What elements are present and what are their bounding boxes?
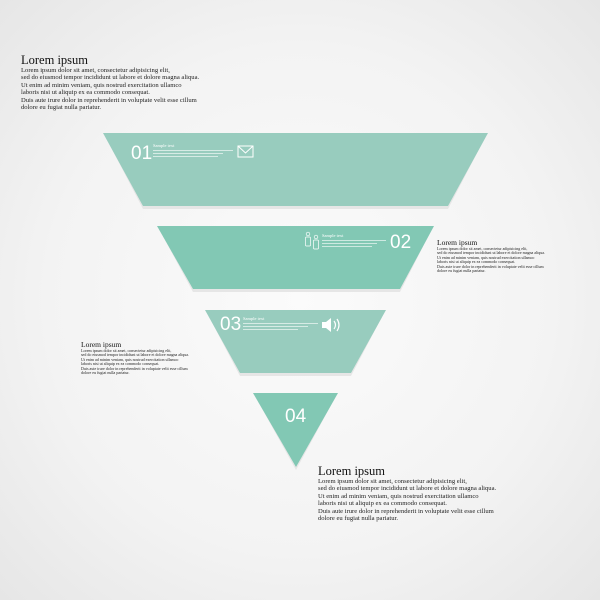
- text block: right of 02: dolore eu fugiat nulla pariatur.: [437, 268, 486, 273]
- text block: right of 02: [437, 238, 545, 273]
- segment 01: Sample text: [153, 143, 175, 148]
- text block: bottom right: Ut enim ad minim veniam, quis nostrud exercitation ullamco: [318, 493, 479, 500]
- text block: left of 03: [81, 340, 189, 375]
- text block: top left: sed do eiusmod tempor incididunt ut labore et dolore magna aliqua.: [21, 74, 199, 81]
- icon: speaker: [322, 318, 339, 332]
- segment 04: [253, 393, 338, 470]
- text block: top left: Lorem ipsum dolor sit amet, consectetur adipisicing elit,: [21, 67, 170, 74]
- text block: left of 03: Duis aute irure dolor in reprehenderit in voluptate velit esse cillum: [81, 366, 188, 371]
- segment 02: [157, 226, 434, 292]
- segment 01: 01: [131, 143, 152, 164]
- text block: right of 02: Ut enim ad minim veniam, quis nostrud exercitation ullamco: [437, 255, 534, 260]
- text block: bottom right: dolore eu fugiat nulla pariatur.: [318, 515, 398, 522]
- text block: left of 03: Lorem ipsum dolor sit amet, consectetur adipisicing elit,: [81, 348, 171, 353]
- segment 02: Sample text: [322, 233, 344, 238]
- icon: envelope: [238, 146, 253, 157]
- text block: left of 03: Lorem ipsum: [81, 340, 121, 349]
- text block: left of 03: Ut enim ad minim veniam, quis nostrud exercitation ullamco: [81, 357, 178, 362]
- text block: bottom right: Lorem ipsum: [318, 464, 385, 478]
- text block: bottom right: laboris nisi ut aliquip ex ea commodo consequat.: [318, 500, 447, 507]
- text block: bottom right: Duis aute irure dolor in reprehenderit in voluptate velit esse cillum: [318, 508, 494, 515]
- text block: right of 02: Lorem ipsum: [437, 238, 477, 247]
- text block: right of 02: sed do eiusmod tempor incididunt ut labore et dolore magna aliqua.: [437, 250, 545, 255]
- icon: people: [306, 232, 318, 249]
- text block: left of 03: laboris nisi ut aliquip ex ea commodo consequat.: [81, 361, 159, 366]
- text block: top left: laboris nisi ut aliquip ex ea commodo consequat.: [21, 89, 150, 96]
- text block: left of 03: dolore eu fugiat nulla pariatur.: [81, 370, 130, 375]
- segment 03: [205, 310, 386, 376]
- text block: left of 03: sed do eiusmod tempor incididunt ut labore et dolore magna aliqua.: [81, 352, 189, 357]
- segment 03: Sample text: [243, 316, 265, 321]
- text block: right of 02: Duis aute irure dolor in reprehenderit in voluptate velit esse cillum: [437, 264, 544, 269]
- text block: top left: Duis aute irure dolor in reprehenderit in voluptate velit esse cillum: [21, 97, 197, 104]
- text block: bottom right: Lorem ipsum dolor sit amet, consectetur adipisicing elit,: [318, 478, 467, 485]
- text block: top left: dolore eu fugiat nulla pariatur.: [21, 104, 101, 111]
- segment 03: 03: [220, 314, 241, 335]
- text block: bottom right: [318, 464, 496, 522]
- text block: top left: [21, 53, 199, 111]
- text block: right of 02: Lorem ipsum dolor sit amet, consectetur adipisicing elit,: [437, 246, 527, 251]
- segment 02: 02: [390, 232, 411, 253]
- text block: bottom right: sed do eiusmod tempor incididunt ut labore et dolore magna aliqua.: [318, 485, 496, 492]
- text block: top left: Ut enim ad minim veniam, quis nostrud exercitation ullamco: [21, 82, 182, 89]
- segment 04: 04: [285, 406, 307, 427]
- text block: top left: Lorem ipsum: [21, 53, 88, 67]
- text block: right of 02: laboris nisi ut aliquip ex ea commodo consequat.: [437, 259, 515, 264]
- segment 01: [103, 133, 488, 209]
